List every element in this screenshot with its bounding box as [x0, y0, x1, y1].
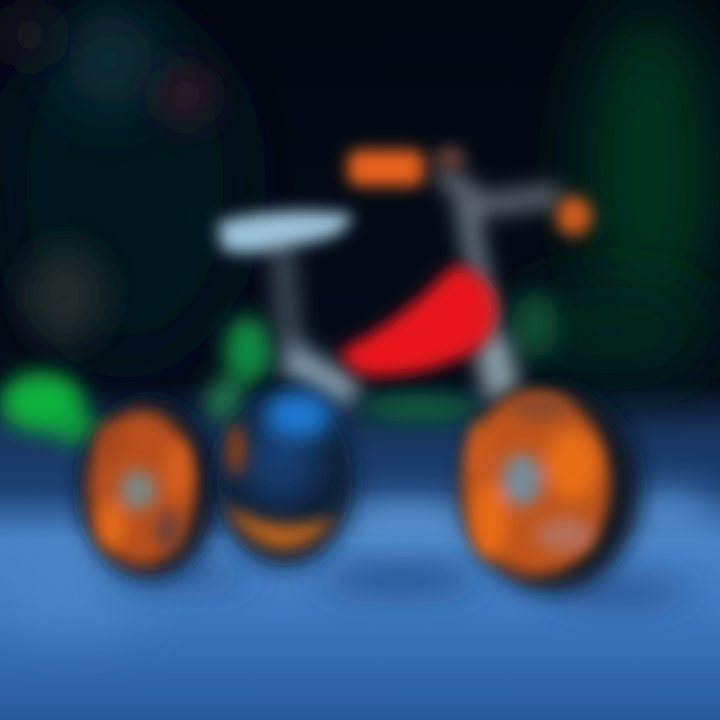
body: red tank [340, 266, 496, 376]
seat: pale blue [218, 211, 352, 253]
ground shadow [110, 566, 690, 602]
handlebar grips: orange [348, 147, 592, 236]
wheel: front [462, 384, 640, 592]
wheel: rear left [80, 398, 220, 578]
bush: green foliage [0, 293, 559, 444]
wheel: rear right [217, 394, 353, 566]
frame: seat post and handle post [282, 170, 560, 400]
body: blue centre [264, 391, 332, 439]
tricycle [80, 147, 640, 592]
ground: blue pavement highlights [5, 491, 715, 620]
background: dark foliage [2, 3, 715, 375]
